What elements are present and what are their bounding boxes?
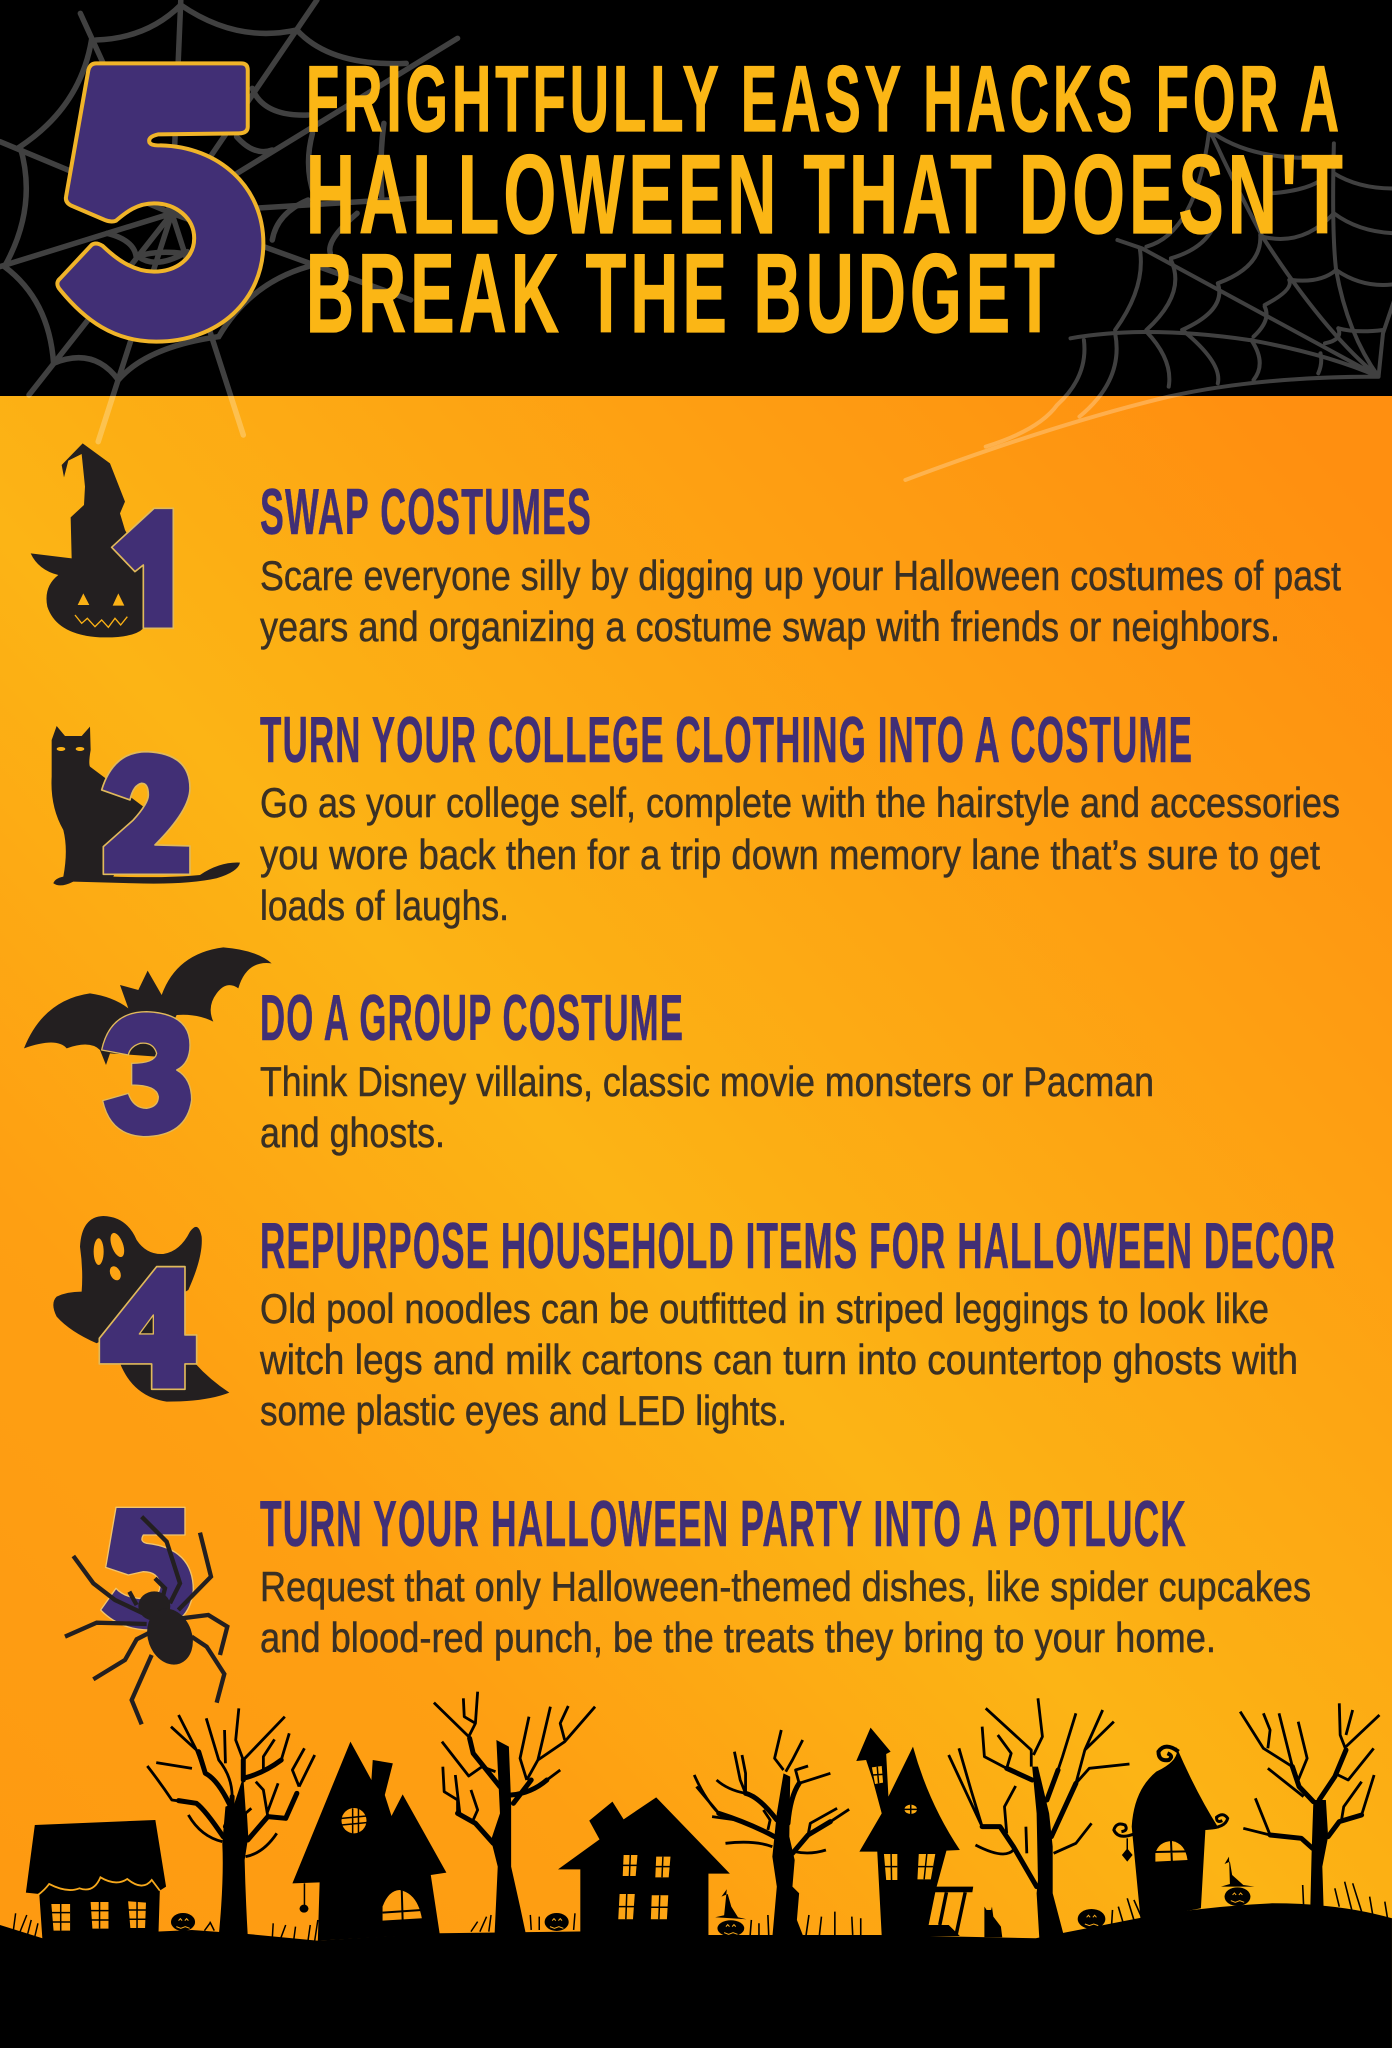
bare tree 1 [147, 1708, 315, 1936]
bare tree 3 [694, 1730, 849, 1937]
tip 3: and ghosts. [260, 1109, 445, 1156]
spider web: left [0, 0, 458, 442]
icon: spider with number 5 [65, 1507, 227, 1724]
title [306, 46, 1347, 356]
icon: black cat with number 2 [51, 726, 240, 885]
pumpkin [171, 1913, 195, 1931]
small black cat [984, 1907, 1002, 1937]
header band [0, 0, 1392, 396]
ground: left [0, 1925, 700, 2048]
grass tufts [13, 1913, 575, 1941]
crooked tower house [856, 1728, 973, 1936]
tip 4 [259, 1209, 1336, 1434]
spider web: right [905, 133, 1392, 480]
bare tree 4 [949, 1698, 1129, 1938]
tip 1: SWAP COSTUMES [260, 475, 592, 548]
house with scalloped roof [26, 1820, 166, 1939]
icon: witch hat pumpkin with number 1 [31, 443, 173, 637]
ground: right hill [692, 1903, 1392, 2048]
big number 5 [57, 63, 263, 342]
tip 2: loads of laughs. [260, 882, 509, 929]
witch-hat pumpkin on hill [1221, 1857, 1254, 1906]
haunted skyline: right half [692, 1698, 1392, 2048]
bare tree 5 [1240, 1703, 1379, 1910]
house with windows [558, 1797, 730, 1936]
curly roof house [1114, 1747, 1228, 1920]
tip 2 [260, 703, 1340, 929]
tip 4: some plastic eyes and LED lights. [260, 1387, 787, 1434]
tip 5: and blood-red punch, be the treats they bring to your home. [260, 1614, 1216, 1661]
tip 3: DO A GROUP COSTUME [260, 981, 684, 1054]
icon: ghost with number 4 [53, 1216, 229, 1402]
tip 5 [260, 1487, 1311, 1661]
tip 1 [260, 475, 1341, 650]
small witch-hat pumpkin [715, 1889, 746, 1936]
tip 3 [260, 981, 1154, 1156]
pumpkin [545, 1913, 569, 1931]
haunted skyline: left half [0, 1692, 730, 2048]
bare tree 2 [434, 1692, 595, 1934]
grass tufts [750, 1882, 1387, 1937]
pumpkin [1078, 1909, 1105, 1929]
tall pointed house [292, 1742, 446, 1941]
icon: bat with number 3 [24, 947, 272, 1137]
tip 3: Think Disney villains, classic movie monsters or Pacman [260, 1058, 1154, 1105]
